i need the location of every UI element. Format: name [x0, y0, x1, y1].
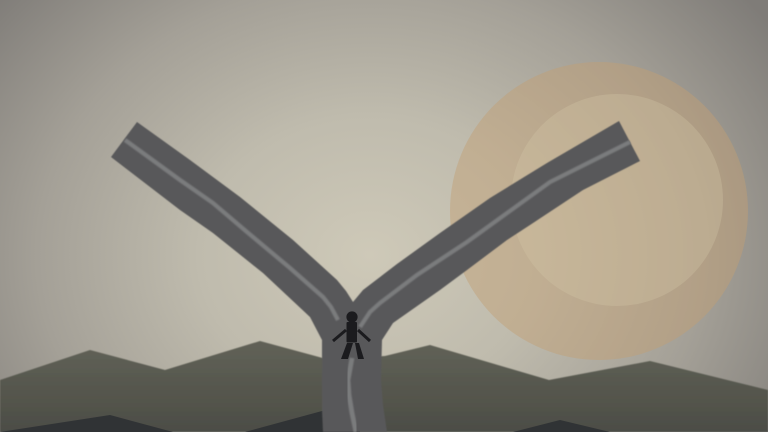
person figure	[333, 311, 370, 359]
head	[346, 311, 358, 323]
legs	[341, 343, 364, 359]
hill centre	[245, 411, 360, 432]
sun	[450, 62, 748, 360]
mountain range	[0, 341, 768, 432]
arms	[333, 330, 370, 341]
sun inner disc	[511, 94, 723, 306]
hill left	[0, 415, 173, 432]
hill right	[513, 420, 610, 432]
foreground dark hills	[0, 411, 610, 432]
sun outer halo	[450, 62, 748, 360]
forked road	[111, 121, 640, 432]
right lane line	[360, 142, 630, 327]
torso	[346, 322, 357, 342]
stem lane line	[348, 358, 356, 432]
road surface	[111, 121, 640, 432]
left lane line	[125, 140, 338, 320]
